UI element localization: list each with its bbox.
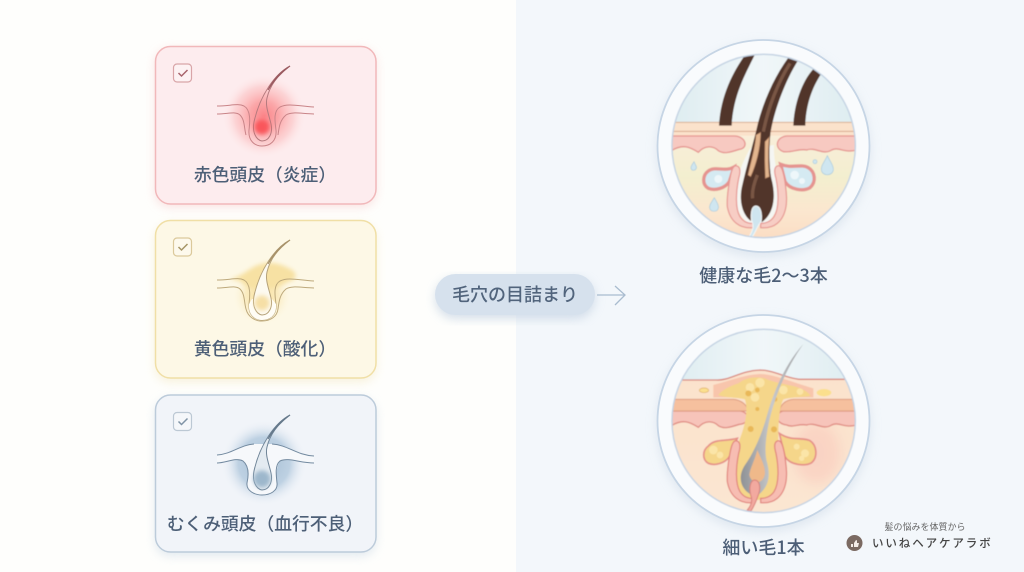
hair highlight xyxy=(752,63,790,198)
panel: yellow scalp xyxy=(155,220,376,382)
wall left xyxy=(727,441,753,503)
orange layer right xyxy=(779,399,863,411)
pink band right xyxy=(777,136,863,152)
arrow xyxy=(597,286,625,305)
panel: healthy pore circle xyxy=(656,40,870,257)
band right xyxy=(777,411,863,427)
sebum specks xyxy=(745,388,777,432)
icon: checkbox xyxy=(174,412,192,430)
main hair xyxy=(741,58,798,222)
blush xyxy=(796,426,840,482)
label: puffy scalp: むくみ頭皮（血行不良） xyxy=(167,510,363,536)
panel: clogged pore circle xyxy=(656,315,870,532)
droplets xyxy=(691,156,833,211)
label: yellow scalp: 黄色頭皮（酸化） xyxy=(194,335,336,361)
right gland xyxy=(781,164,814,190)
left gland xyxy=(704,438,737,464)
icon: checkbox xyxy=(174,238,192,256)
papilla xyxy=(749,206,761,237)
panel: red scalp xyxy=(155,46,376,207)
hair sheath strip right xyxy=(765,137,769,178)
orange layer left xyxy=(663,399,749,411)
illustration: healthy follicle xyxy=(670,53,856,239)
bulb core xyxy=(749,450,765,482)
label: thin hair: 細い毛1本 xyxy=(722,534,805,560)
thin hair xyxy=(741,344,803,494)
label: red scalp: 赤色頭皮（炎症） xyxy=(194,161,336,187)
callout: clogged pores: 毛穴の目詰まり xyxy=(452,281,578,307)
pink band left xyxy=(663,136,745,153)
papilla xyxy=(747,480,760,511)
wall left xyxy=(727,166,753,228)
illustration: clogged follicle xyxy=(671,328,856,514)
hair sheath strip left xyxy=(748,132,761,177)
logo tagline: 髪の悩みを体質から xyxy=(884,520,966,533)
logo name: いいねヘアケアラボ xyxy=(872,535,993,551)
icon: oxidised follicle xyxy=(217,240,314,326)
left gland xyxy=(704,167,734,189)
wall right xyxy=(761,166,787,228)
band left xyxy=(663,411,748,428)
callout: clogged pores xyxy=(435,274,595,319)
right gland xyxy=(779,433,816,465)
icon: swollen follicle xyxy=(217,415,314,506)
surface cysts xyxy=(699,388,709,393)
wall right xyxy=(761,441,787,503)
logo xyxy=(846,520,993,551)
background right xyxy=(516,0,1024,572)
small hairs xyxy=(719,55,755,126)
icon: checkbox xyxy=(174,64,192,82)
sebum plug xyxy=(718,377,811,500)
label: healthy: 健康な毛2〜3本 xyxy=(699,262,828,288)
background left xyxy=(0,0,516,572)
icon: inflamed follicle xyxy=(217,66,314,158)
follicle sheath xyxy=(736,145,779,225)
sebum bubbles xyxy=(709,378,809,461)
logo icon xyxy=(846,535,862,551)
panel: puffy scalp xyxy=(155,395,376,556)
